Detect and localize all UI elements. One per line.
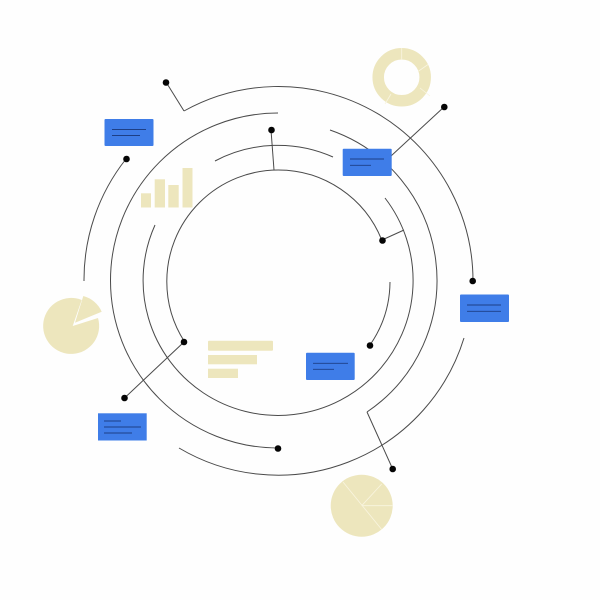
blue card: top right <box>343 149 392 176</box>
blue card: centre <box>306 353 355 380</box>
segmented pie chart <box>331 475 393 537</box>
blue card: bottom left <box>98 413 147 440</box>
column chart <box>141 168 192 208</box>
blue card: top left <box>104 119 154 146</box>
horizontal bar chart <box>208 341 273 378</box>
pie chart with exploded slice <box>43 296 102 354</box>
donut chart <box>378 48 430 104</box>
concentric arcs <box>84 87 473 475</box>
connector lines <box>124 82 444 469</box>
blue card: right <box>460 294 509 322</box>
marker dots <box>121 79 476 472</box>
